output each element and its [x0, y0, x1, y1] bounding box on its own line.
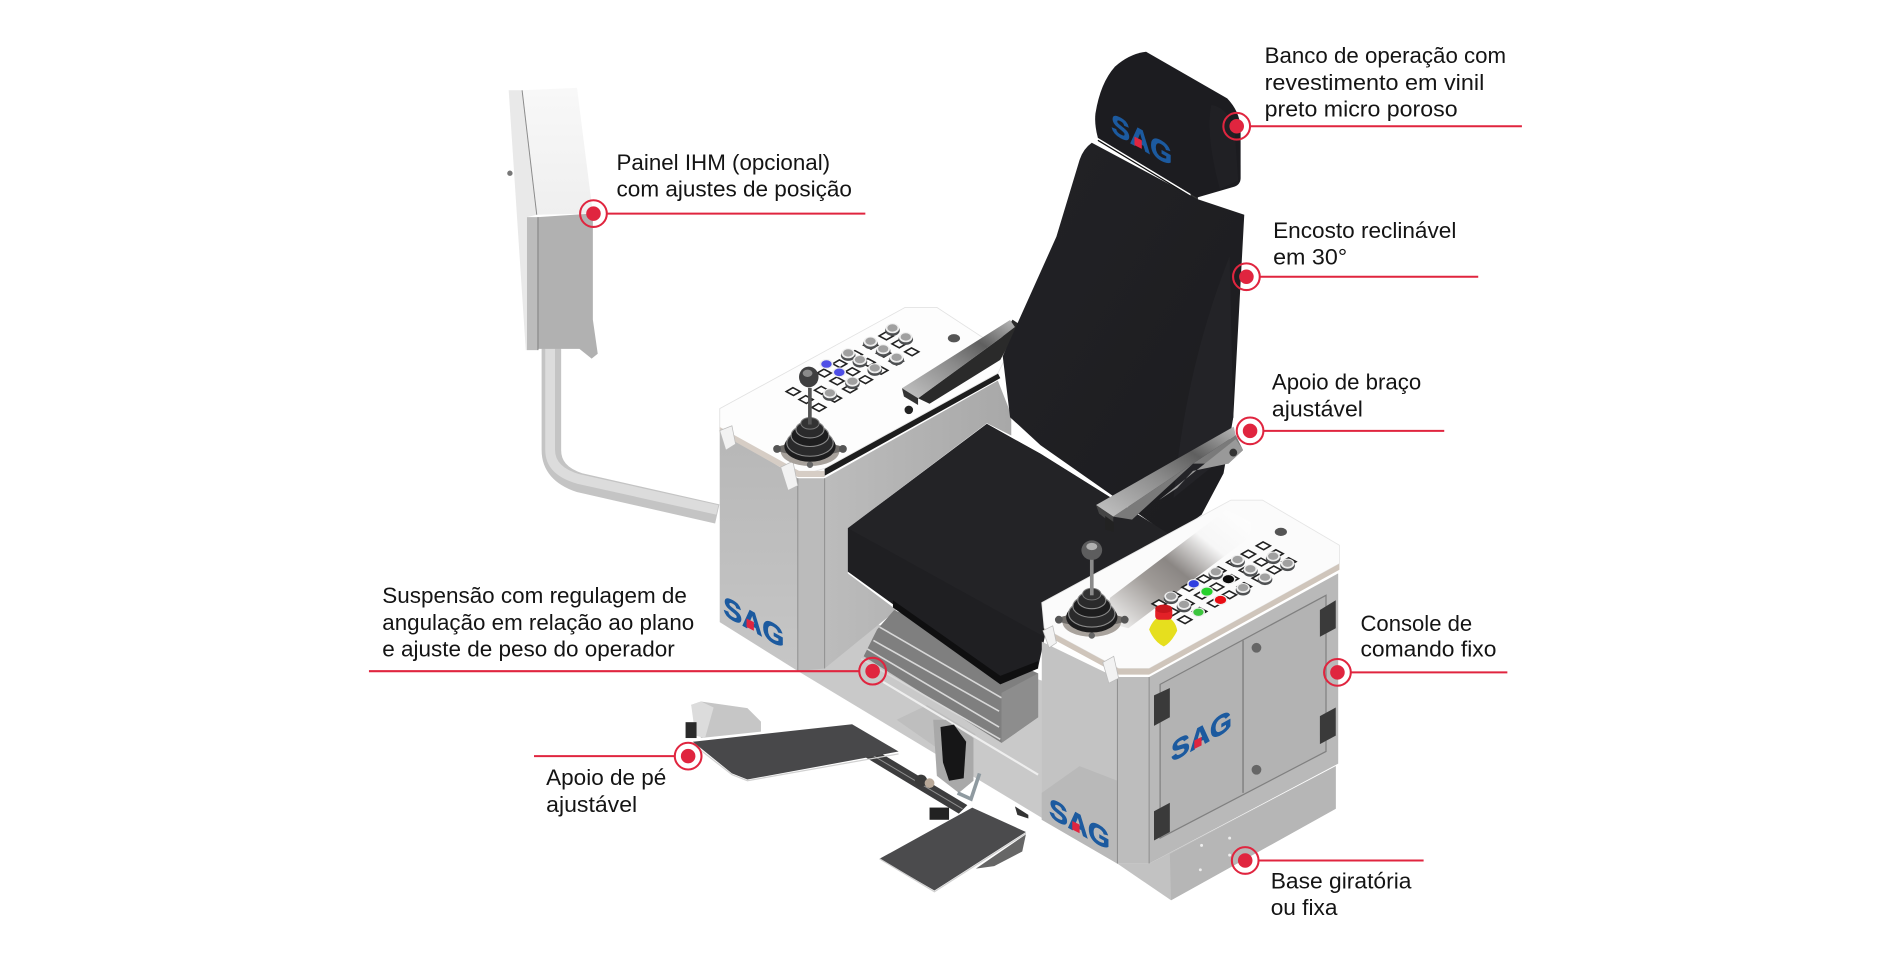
callout: Base giratória: ou fixa: [1271, 895, 1338, 920]
callouts: [369, 43, 1522, 920]
callout: Apoio de braço: [1237, 370, 1444, 444]
emergency stop button: [1149, 604, 1177, 647]
callout: Encosto reclinável: [1233, 218, 1478, 290]
left joystick: [773, 367, 847, 468]
HMI support pole: [550, 348, 717, 514]
cabinet doors: [1154, 595, 1336, 841]
right armrest: [1096, 427, 1243, 532]
left footrest plate: [693, 724, 899, 781]
callout: Console de comando: Console de: [1361, 611, 1472, 636]
callout: Console de comando: [1324, 611, 1507, 686]
callout: Banco de operação: Banco de operação com: [1265, 43, 1506, 68]
callout: Banco de operação: [1223, 43, 1522, 140]
SAG logo: right console side: SAG: [1049, 793, 1110, 857]
callout: Painel IHM: Painel IHM (opcional): [617, 150, 830, 175]
callout: Suspensão: e ajuste de peso do operador: [382, 637, 675, 662]
platform and base frame: [798, 616, 1049, 822]
footrest bar and bracket: [848, 720, 980, 820]
callout: Suspensão: Suspensão com regulagem de: [382, 583, 687, 608]
right console body: [1042, 573, 1338, 864]
right console buttons: [1152, 528, 1296, 624]
SAG logo: cabinet door: SAG: [1171, 704, 1232, 769]
callout: Apoio de pé: [534, 743, 701, 817]
right console top plate: [1042, 500, 1339, 683]
callout: Encosto reclinável: Encosto reclinável: [1273, 218, 1456, 243]
left foot pedal box: [686, 701, 761, 738]
SAG logo: left console: SAG: [723, 591, 784, 655]
callout: Encosto reclinável: em 30°: [1273, 245, 1347, 270]
callout: Painel IHM: com ajustes de posição: [617, 177, 852, 202]
seat cushion: [848, 424, 1174, 684]
callout: Base giratória: [1232, 847, 1424, 920]
callout: Suspensão: angulação em relação ao plano: [382, 610, 694, 635]
right joystick: [1055, 540, 1129, 639]
callout: Apoio de pé: Apoio de pé: [546, 765, 666, 790]
callout: Banco de operação: preto micro poroso: [1265, 97, 1458, 122]
left armrest: [902, 320, 1020, 414]
callout: Banco de operação: revestimento em vinil: [1265, 70, 1484, 95]
callout: Apoio de braço: ajustável: [1272, 396, 1363, 421]
suspension stack: [861, 610, 1038, 743]
left console top plate: [720, 307, 1008, 490]
callout: Apoio de braço: Apoio de braço: [1272, 370, 1421, 395]
right console rotating base: [1117, 766, 1336, 900]
callout: Console de comando: comando fixo: [1361, 637, 1496, 662]
left console buttons: [786, 323, 960, 411]
HMI panel (optional): [507, 88, 598, 359]
SAG logo: headrest: SAG: [1111, 108, 1172, 173]
callout: Suspensão: [369, 583, 886, 685]
backrest: [1003, 143, 1244, 537]
right footrest plate: [880, 808, 1026, 892]
callout: Base giratória: Base giratória: [1271, 868, 1412, 893]
left console body: [720, 373, 1011, 671]
headrest: [1095, 52, 1241, 205]
callout: Painel IHM: [580, 150, 865, 227]
callout: Apoio de pé: ajustável: [546, 792, 637, 817]
operator chair machine: [507, 52, 1339, 900]
